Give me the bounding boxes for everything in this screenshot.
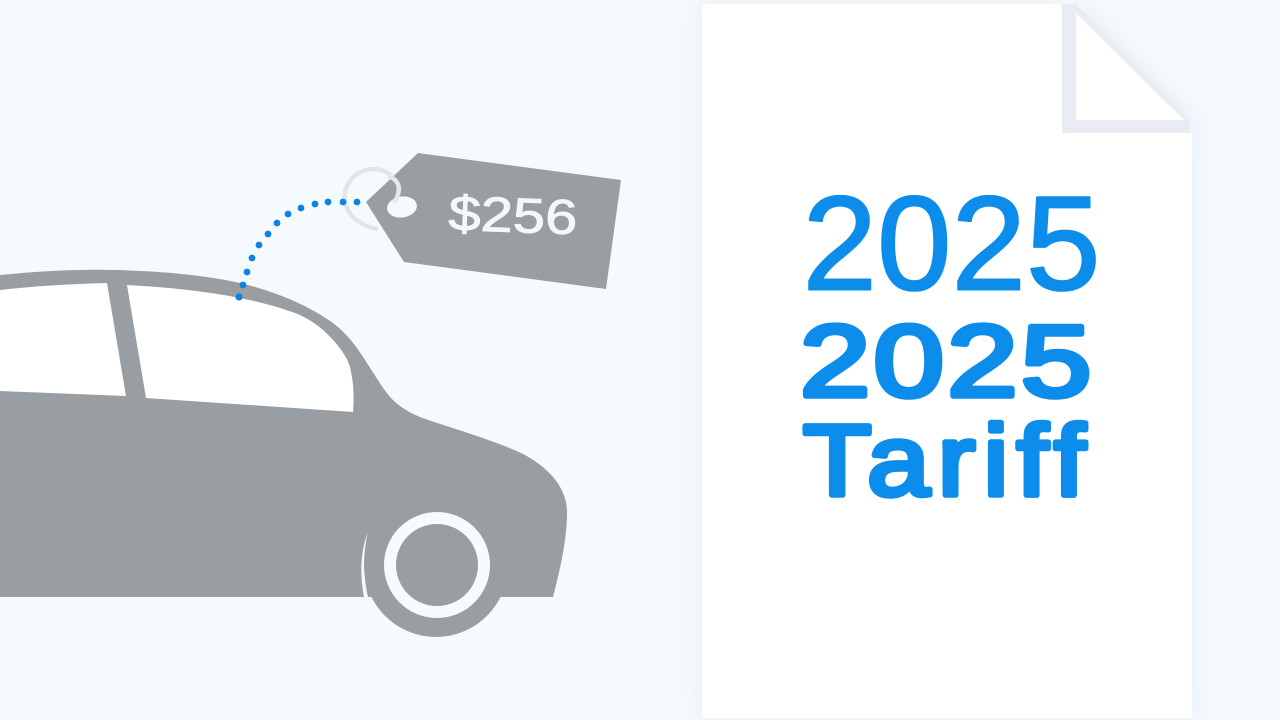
folded corner band bbox=[1062, 4, 1190, 133]
tag hole bbox=[386, 195, 418, 219]
wheel arch sliver bbox=[361, 532, 368, 597]
dotted connector bbox=[235, 199, 360, 301]
heading line 2: 2025 bbox=[800, 306, 1091, 418]
car body bbox=[0, 270, 567, 597]
tag string front bbox=[388, 176, 399, 203]
tire bbox=[364, 493, 508, 637]
heading: 2025 2025 Tariff bbox=[800, 170, 1100, 517]
front window bbox=[127, 285, 354, 412]
heading line 1: 2025 bbox=[802, 170, 1100, 318]
tag string back bbox=[345, 169, 392, 229]
price tag bbox=[345, 153, 621, 289]
heading line 3: Tariff bbox=[803, 406, 1086, 517]
folded corner bbox=[1076, 13, 1184, 120]
car illustration bbox=[0, 270, 567, 637]
wheel rim bbox=[390, 518, 484, 612]
fold shadow bbox=[1080, 4, 1200, 126]
document shadow bbox=[702, 4, 1192, 718]
document page bbox=[702, 4, 1192, 718]
rear window bbox=[0, 283, 126, 396]
price text: $256 bbox=[448, 187, 578, 245]
tag shape bbox=[366, 153, 621, 289]
